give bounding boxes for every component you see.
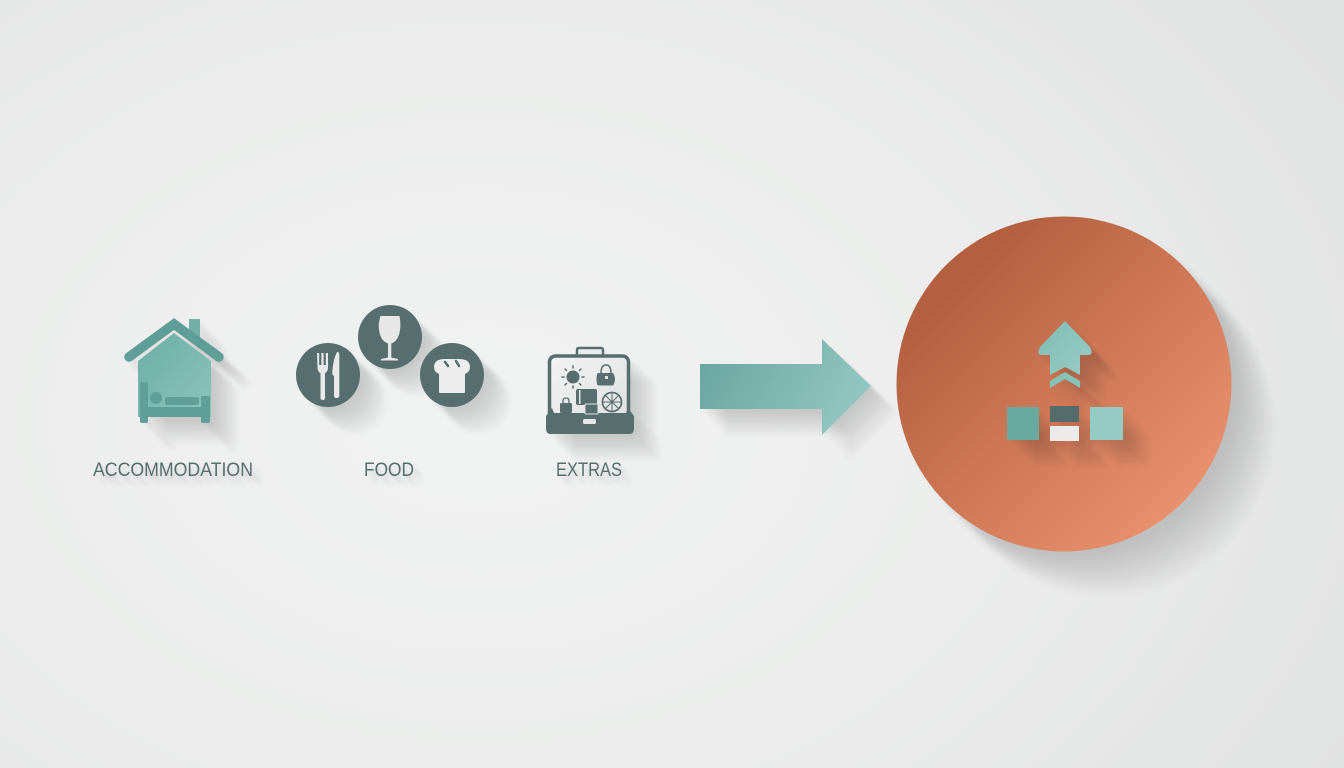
icon: upward arrow with chevron (1038, 321, 1092, 388)
label: food: FOOD (364, 460, 414, 481)
coral disc (896, 216, 1232, 552)
label: accommodation: ACCOMMODATION (93, 460, 253, 481)
icon group: food (296, 305, 484, 407)
icon: house with bed (129, 319, 219, 423)
panel: coral result circle (896, 216, 1232, 552)
label: extras: EXTRAS (556, 460, 622, 481)
icon: bread (420, 343, 484, 407)
icon: fork and knife (296, 343, 360, 407)
icon: suitcase with travel extras (546, 348, 634, 434)
icon: three budget blocks (1007, 406, 1123, 441)
icon: wine glass (358, 305, 422, 369)
arrow (700, 339, 871, 435)
